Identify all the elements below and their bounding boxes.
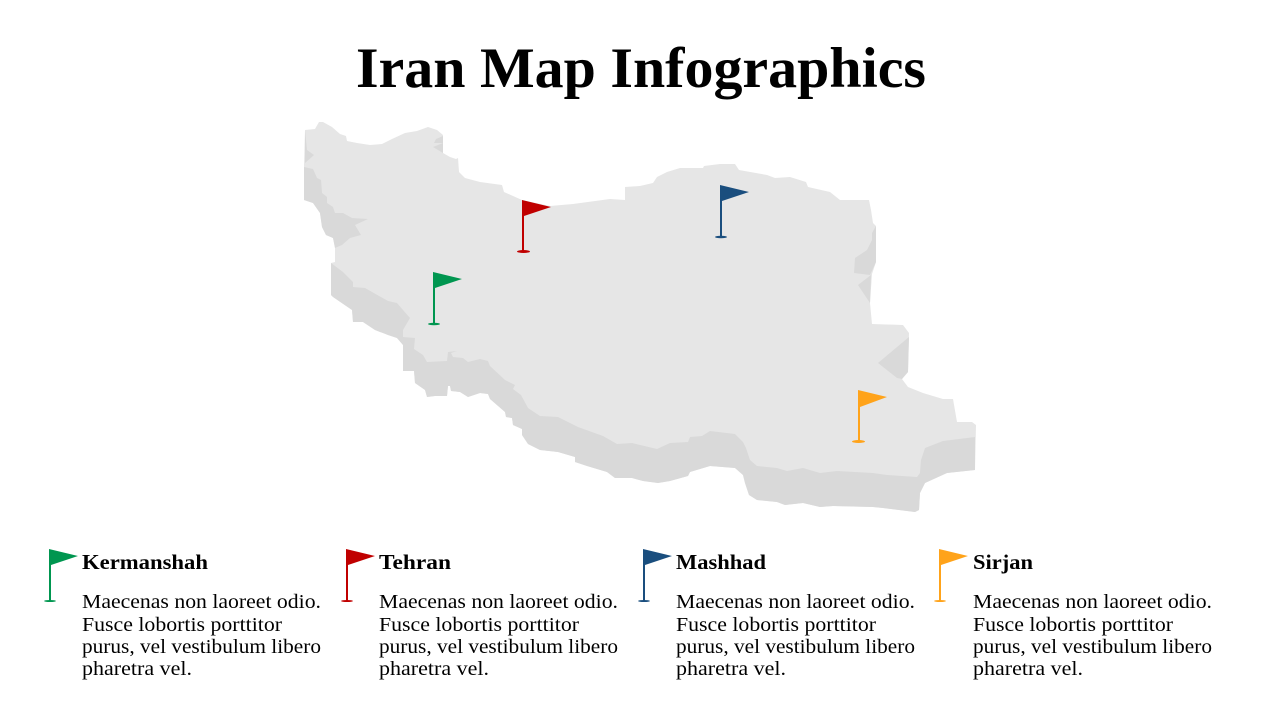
text block: Mashhad [676, 591, 915, 680]
heading: Kermanshah: Kermanshah [82, 550, 208, 574]
map shaded north-west strip [305, 130, 314, 163]
text block: Sirjan: Maecenas non laoreet odio. [973, 591, 1212, 613]
text block: Mashhad: purus, vel vestibulum libero [676, 636, 915, 658]
map of Iran [304, 122, 976, 512]
heading: Sirjan: Sirjan [973, 550, 1033, 574]
legend item: Sirjan [934, 549, 1212, 680]
text block: Sirjan: pharetra vel. [973, 658, 1083, 680]
map flag: Tehran [517, 200, 551, 253]
icon: red flag [341, 549, 375, 602]
text block: Sirjan: Fusce lobortis porttitor [973, 614, 1173, 636]
map flag: Sirjan [852, 390, 887, 443]
map shaded east wedge [858, 275, 871, 303]
map flag: Mashhad [715, 185, 749, 238]
map shaded south edge [331, 263, 975, 512]
map shaded north-west edge [304, 167, 368, 248]
legend item: Tehran [341, 549, 618, 680]
text block: Kermanshah: pharetra vel. [82, 658, 192, 680]
text block: Tehran: pharetra vel. [379, 658, 489, 680]
text block: Kermanshah [82, 591, 321, 680]
map shaded north notch [433, 136, 443, 153]
legend item: Kermanshah [44, 549, 321, 680]
text block: Kermanshah: purus, vel vestibulum libero [82, 636, 321, 658]
icon: blue flag [638, 549, 672, 602]
map shaded east patch [854, 226, 876, 275]
heading: Tehran: Tehran [379, 550, 451, 574]
text block: Sirjan [973, 591, 1212, 680]
text block: Sirjan: purus, vel vestibulum libero [973, 636, 1212, 658]
map flag: Kermanshah [428, 272, 462, 325]
map shaded south-east wedge [878, 337, 909, 379]
text block: Tehran: Maecenas non laoreet odio. [379, 591, 618, 613]
text block: Kermanshah: Fusce lobortis porttitor [82, 614, 282, 636]
text block: Tehran: Fusce lobortis porttitor [379, 614, 579, 636]
text block: Tehran [379, 591, 618, 680]
heading: Mashhad: Mashhad [676, 550, 766, 574]
text block: Kermanshah: Maecenas non laoreet odio. [82, 591, 321, 613]
text block: Tehran: purus, vel vestibulum libero [379, 636, 618, 658]
icon: green flag [44, 549, 78, 602]
text block: Mashhad: Maecenas non laoreet odio. [676, 591, 915, 613]
text block: Mashhad: pharetra vel. [676, 658, 786, 680]
legend item: Mashhad [638, 549, 915, 680]
title: Iran Map Infographics [356, 37, 926, 100]
map top surface [304, 122, 976, 512]
text block: Mashhad: Fusce lobortis porttitor [676, 614, 876, 636]
icon: orange flag [934, 549, 968, 602]
